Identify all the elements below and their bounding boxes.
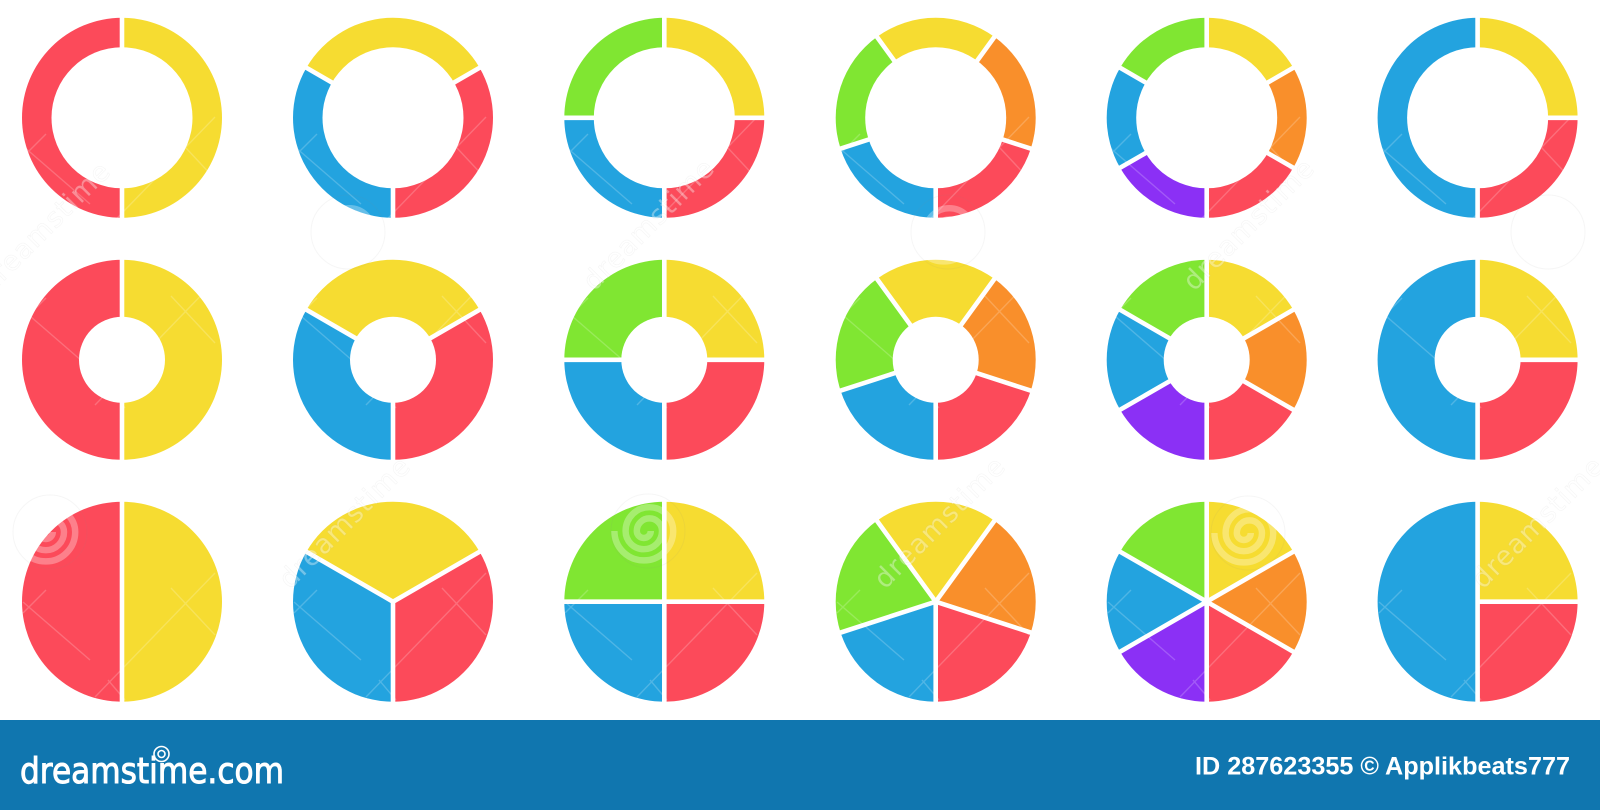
watermark text: dreamstime xyxy=(577,153,721,297)
pie: 6 segments xyxy=(1107,499,1307,705)
watermark hairlines xyxy=(23,117,1571,700)
row 1: thin donut charts xyxy=(22,15,1581,221)
footer image id and credit: ID 287623355 © Applikbeats777 xyxy=(1195,752,1570,780)
thin donut: 4 segments xyxy=(561,15,767,221)
watermark text: dreamstime xyxy=(1177,153,1321,297)
thin donut: 3 segments xyxy=(293,18,493,221)
thick donut: 4 segments xyxy=(561,257,767,463)
thick donut: 6 segments xyxy=(1107,257,1307,463)
watermark spirals xyxy=(16,208,1573,562)
thin donut: 5 segments xyxy=(836,18,1036,221)
thick donut: 3 segments xyxy=(293,260,493,463)
row 3: pie charts xyxy=(22,499,1581,705)
pie: 3 segments xyxy=(293,502,493,705)
thin donut: half and two quarters xyxy=(1378,15,1581,221)
watermark text: dreamstime xyxy=(273,451,417,595)
pie: 4 segments xyxy=(561,499,767,705)
pie: 5 segments xyxy=(836,502,1036,705)
row 2: thick donut charts xyxy=(22,257,1581,463)
thick donut: 5 segments xyxy=(836,260,1036,463)
thick donut: 2 segments xyxy=(22,257,222,463)
thin donut: 2 segments xyxy=(22,15,222,221)
watermark text: dreamstime xyxy=(868,451,1012,595)
watermark spiral outer rings xyxy=(13,195,1585,570)
footer bar xyxy=(0,720,1600,810)
pie: 2 segments xyxy=(22,499,222,705)
thin donut: 6 segments xyxy=(1107,15,1307,221)
watermark text xyxy=(0,153,1600,595)
footer logo spiral icon xyxy=(154,746,169,762)
thick donut: half and two quarters xyxy=(1378,257,1581,463)
pie: half and two quarters xyxy=(1378,499,1581,705)
footer logo wordmark: dreamstime.com xyxy=(20,751,284,792)
